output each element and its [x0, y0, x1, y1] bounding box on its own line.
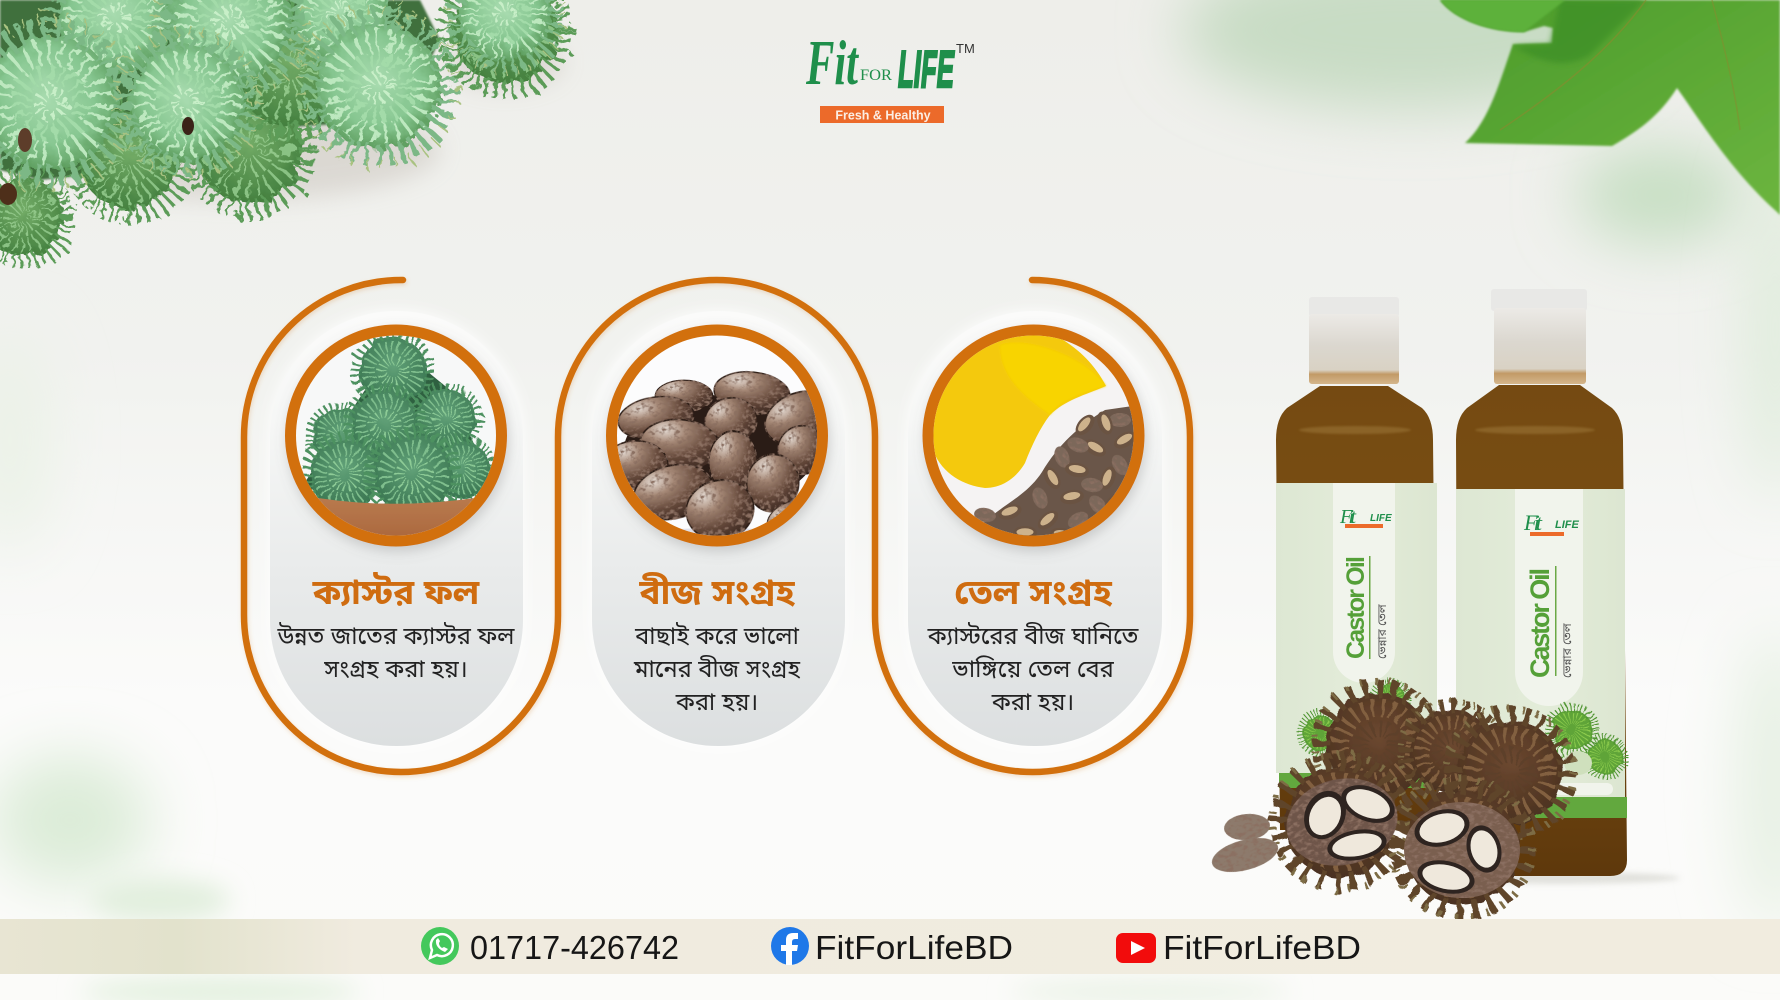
bottle right: Castor Oil	[1525, 568, 1555, 678]
step 3: oil collection	[922, 324, 1144, 716]
castor fruit cluster, top left	[0, 0, 564, 262]
bottle left: ভেন্নার তেল	[1375, 604, 1389, 659]
green leaf, top right	[1440, 0, 1780, 215]
brown castor fruits	[1272, 681, 1574, 918]
image: castor seeds	[604, 324, 842, 552]
description: ক্যাস্টরের বীজ ঘানিতে	[927, 622, 1139, 650]
heading: তেল সংগ্রহ	[954, 573, 1113, 612]
bottle right: Fit	[1523, 510, 1543, 535]
logo	[805, 27, 975, 123]
description: বাছাই করে ভালো	[634, 622, 800, 650]
heading: বীজ সংগ্রহ	[638, 572, 795, 612]
logo: TM	[956, 41, 975, 56]
inner pill panels	[270, 311, 1162, 746]
bottle right	[1456, 289, 1627, 876]
description: ভাঙ্গিয়ে তেল বের	[951, 655, 1115, 683]
bottle left: Castor Oil	[1342, 556, 1370, 659]
bottle left: Fit	[1339, 506, 1356, 528]
bottle right: ভেন্নার তেল	[1560, 623, 1574, 678]
step 2: seed collection	[604, 324, 842, 716]
logo: Fresh & Healthy	[835, 108, 931, 122]
description: করা হয়।	[991, 690, 1074, 716]
icon: youtube	[1116, 933, 1156, 963]
heading: ক্যাস্টর ফল	[312, 572, 480, 612]
youtube contact: FitForLifeBD	[1163, 929, 1361, 966]
logo: FOR	[860, 67, 892, 84]
bottle right: LIFE	[1555, 519, 1579, 531]
icon: whatsapp	[421, 927, 459, 965]
image: green castor fruits in bowl	[285, 324, 507, 546]
facebook contact: FitForLifeBD	[815, 929, 1013, 966]
product: two castor oil bottles with fruits	[1208, 289, 1680, 918]
whatsapp contact: 01717-426742	[470, 929, 679, 966]
orange serpentine outline	[244, 280, 1190, 772]
icon: facebook	[771, 927, 809, 965]
contact band	[0, 919, 1780, 974]
description: মানের বীজ সংগ্রহ	[633, 655, 800, 683]
bottle left	[1276, 297, 1437, 830]
castor seeds	[1208, 812, 1282, 878]
description: সংগ্রহ করা হয়।	[323, 657, 468, 683]
image: oil and crushed seeds	[922, 324, 1144, 546]
bottle left: LIFE	[1370, 513, 1392, 524]
description: উন্নত জাতের ক্যাস্টর ফল	[276, 622, 515, 650]
description: করা হয়।	[675, 690, 758, 716]
step 1: castor fruit	[276, 324, 515, 683]
logo: LIFE	[898, 41, 955, 99]
logo: Fit	[805, 27, 859, 98]
